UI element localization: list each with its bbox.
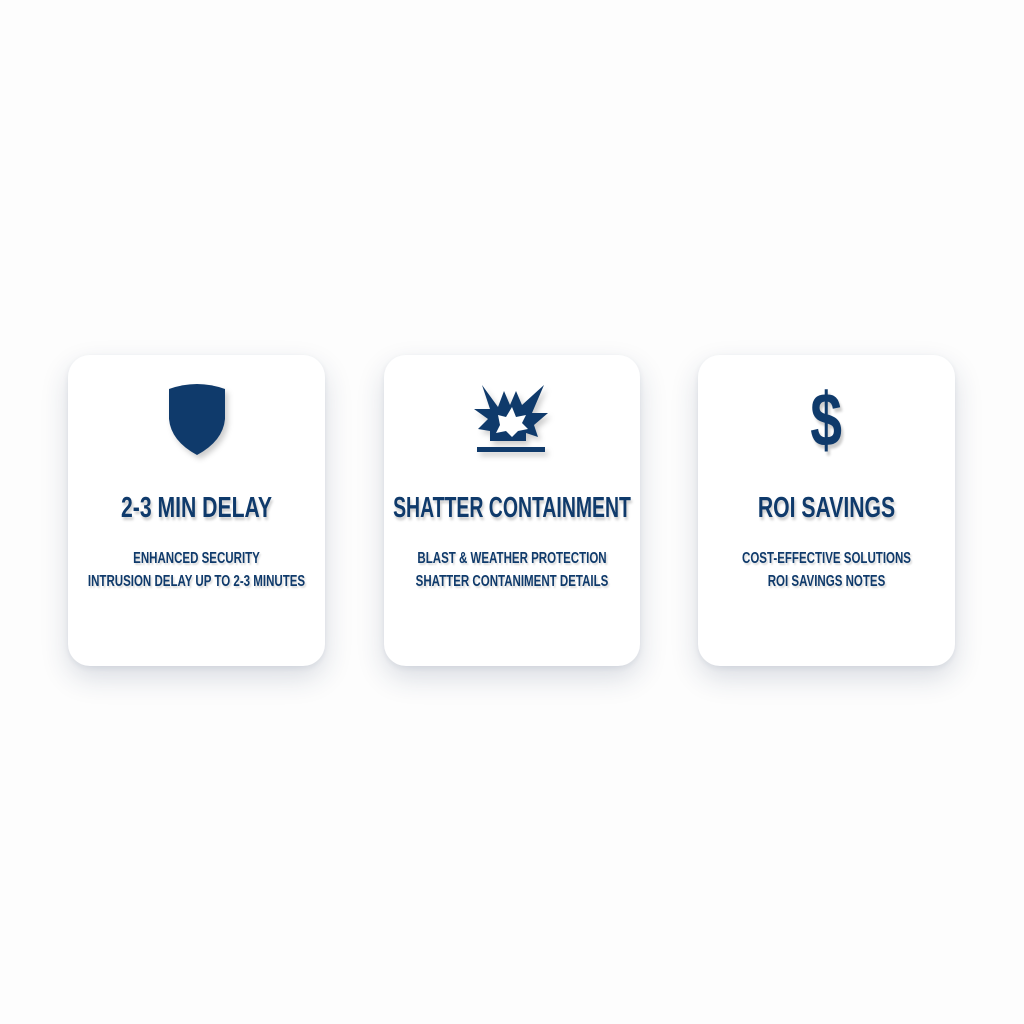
text block (416, 550, 610, 590)
text block: BLAST & WEATHER PROTECTION (417, 550, 607, 567)
text block: INTRUSION DELAY UP TO 2-3 MINUTES (88, 573, 305, 590)
text block: COST-EFFECTIVE SOLUTIONS (742, 550, 911, 567)
card: 2-3 min delay (68, 355, 325, 666)
icon: dollar: $ (811, 378, 842, 463)
heading: ROI SAVINGS (758, 492, 895, 524)
card: roi savings (698, 355, 955, 666)
text block (742, 550, 912, 590)
icon: explosion (474, 385, 550, 458)
heading: SHATTER CONTAINMENT (393, 492, 631, 524)
text block: ROI SAVINGS NOTES (768, 573, 885, 590)
icon: shield (169, 384, 230, 460)
text block: ENHANCED SECURITY (133, 550, 260, 567)
card: shatter containment (384, 355, 640, 666)
text block (88, 550, 306, 590)
heading: 2-3 MIN DELAY (121, 492, 272, 524)
text block: SHATTER CONTANIMENT DETAILS (416, 573, 608, 590)
